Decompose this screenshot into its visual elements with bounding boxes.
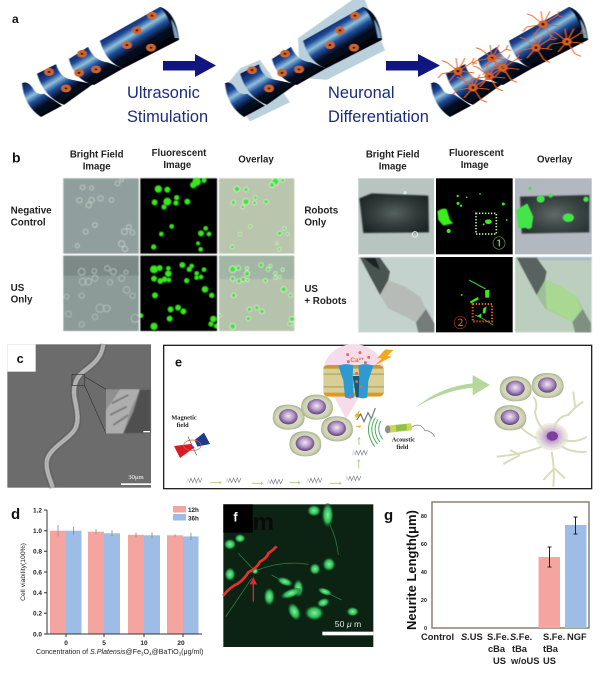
row labels [304, 206, 347, 307]
panel label f [223, 504, 274, 536]
scale bar 50 um [322, 619, 373, 635]
label: neuronal differentiation: Neuronal [328, 84, 395, 102]
category labels: S.Fe. [487, 632, 509, 642]
y tick labels: 40 [421, 570, 427, 576]
y tick labels: 0.8 [33, 548, 42, 556]
column headings: Fluorescent [449, 148, 504, 159]
helix robot with cells [22, 7, 179, 117]
row labels: US [304, 284, 318, 295]
dotted region marker 1 [476, 213, 496, 234]
fluorescent: negative control [140, 178, 217, 254]
row labels [11, 205, 52, 306]
panel label c: c [17, 352, 24, 366]
green neuron cells [224, 503, 359, 622]
category labels: S.US [461, 632, 483, 642]
panel f: fluorescent micrograph of neurites [223, 503, 373, 647]
column headings: Fluorescent [152, 148, 207, 159]
column headings: Image [83, 161, 111, 172]
overlay: negative control [219, 178, 294, 254]
bars [538, 525, 586, 628]
y tick labels: 1.0 [33, 528, 42, 535]
category labels: tBa [543, 644, 559, 654]
legend: 12h [188, 507, 199, 514]
panel label f: m [253, 509, 274, 536]
dotted region marker 2 [473, 304, 492, 321]
panel label a: a [12, 12, 19, 26]
arrow: ultrasonic stimulation [163, 54, 216, 77]
magnified ion channel: Ca²⁺ [350, 357, 365, 364]
DNA path along the bottom [187, 437, 368, 485]
category labels: w/oUS [510, 656, 539, 666]
panel label c [7, 344, 36, 372]
row labels: Control [11, 217, 46, 228]
magnetic field label: field [177, 422, 189, 429]
y axis title: Cell viability(100%) [20, 543, 27, 601]
x tick labels: 0 [64, 640, 68, 647]
scale bar 30 um: 30μm [128, 474, 145, 481]
panel label d: d [11, 506, 20, 523]
column headings: Bright Field [366, 149, 420, 160]
axes [44, 510, 202, 637]
category labels: S.Fe. [543, 632, 565, 642]
fluorescent: US only [139, 256, 218, 331]
y tick labels: 0 [424, 626, 427, 632]
magnetic field label: Magnetic [171, 415, 197, 422]
panel label f: f [233, 511, 238, 525]
label: neuronal differentiation: Differentiation [328, 108, 429, 126]
legend: 36h [188, 516, 199, 522]
icon: magnet [174, 433, 210, 458]
row labels: Only [11, 295, 33, 306]
x axis title: 4 [149, 652, 152, 656]
callout number 2: ② [454, 313, 467, 332]
y tick labels: 80 [421, 514, 427, 520]
zoom inset [72, 374, 151, 433]
x axis title: 3 [179, 652, 182, 656]
column headings: Overlay [238, 155, 274, 166]
panel c: SEM micrograph of helical filament [7, 344, 152, 488]
category labels: cBa [488, 644, 506, 654]
icon: acoustic transducer [385, 423, 435, 437]
category labels: Control [421, 632, 454, 642]
legend [173, 506, 199, 522]
sparks and DNA near transducer [355, 408, 375, 429]
bright field: robots only [358, 178, 434, 254]
panel b left: negative control and US only micrographs [11, 148, 296, 331]
overlay: US plus robots [515, 257, 592, 332]
category labels: US [493, 656, 506, 666]
plot frame [432, 502, 589, 628]
y tick labels: 0.0 [33, 632, 42, 638]
row labels: Robots [304, 206, 339, 217]
row labels: US [11, 283, 25, 294]
neighbouring cells [494, 373, 564, 430]
y tick labels: 1.2 [33, 508, 42, 514]
overlay: US only [218, 256, 296, 331]
x axis title: O [144, 648, 150, 656]
label: ultrasonic stimulation: Stimulation [127, 108, 208, 126]
category labels: tBa [512, 644, 528, 654]
column headings [366, 148, 573, 172]
y tick labels [33, 508, 42, 638]
arrow: neuronal differentiation [386, 54, 440, 77]
panel d: cell viability bar chart [11, 506, 203, 656]
column headings: Image [163, 160, 192, 171]
acoustic waves [368, 416, 383, 447]
overlay: robots only [515, 178, 592, 254]
category labels: US [543, 656, 556, 666]
category labels: S.Fe. [510, 632, 532, 642]
y tick labels: 0.2 [33, 610, 42, 618]
panel label b: b [12, 149, 21, 165]
helix robot with differentiated neurons [431, 7, 588, 117]
error bars [58, 525, 191, 540]
panel b right: robots only and US plus robots micrographs [304, 148, 592, 332]
label: ultrasonic stimulation: Ultrasonic [127, 84, 200, 102]
x tick labels: 5 [102, 640, 106, 647]
acoustic field label: field [396, 444, 409, 451]
error bars [548, 517, 578, 567]
neurite extensions [226, 525, 342, 617]
x tick labels [64, 640, 185, 647]
arrow: differentiation [416, 375, 490, 407]
red arrow [250, 577, 257, 602]
bars [50, 531, 198, 634]
category labels: NGF [567, 632, 587, 642]
x tick labels: 20 [177, 640, 185, 647]
row labels: Only [304, 218, 327, 229]
acoustic field label: Acoustic [392, 437, 415, 444]
y tick labels: 0.4 [33, 590, 42, 597]
column headings: Overlay [537, 155, 573, 166]
x axis title: 3 [141, 652, 144, 656]
callout number 1: ① [492, 233, 506, 252]
column headings: Image [379, 161, 407, 172]
cell cluster [273, 395, 333, 456]
red helix filament [223, 546, 277, 596]
column headings: Bright Field [70, 149, 124, 160]
fluorescent: US plus robots [436, 257, 513, 332]
row labels: + Robots [304, 296, 347, 307]
y tick labels: 0.6 [33, 570, 42, 576]
x tick labels: 10 [140, 640, 148, 647]
column headings [70, 148, 274, 172]
y tick labels: 20 [421, 598, 427, 604]
column headings: Image [461, 160, 489, 171]
x axis title: Concentration of S.Platensis@Fe [36, 648, 141, 656]
helix robot under ultrasound [225, 0, 385, 121]
x axis title: (μg/ml) [181, 648, 203, 656]
row labels: Negative [11, 205, 52, 216]
magnified ion channel [323, 344, 385, 419]
panel e: mechanism diagram [164, 344, 592, 489]
bright field: US only [63, 256, 139, 331]
panel label g: g [384, 507, 393, 524]
y tick labels: 60 [421, 542, 427, 548]
x axis title: @BaTiO [152, 648, 179, 656]
differentiated neuron [497, 392, 587, 487]
helical filament [47, 344, 103, 488]
frame [164, 345, 592, 489]
fluorescent: robots only [436, 178, 513, 254]
y axis title: Neurite Length(μm) [404, 510, 419, 630]
scale bar 30 um [121, 474, 152, 485]
panel label e: e [175, 356, 182, 370]
category labels [421, 632, 587, 666]
bright field: US plus robots [358, 257, 434, 332]
bright field: negative control [63, 178, 139, 254]
scale bar 50 um: 50 μ m [335, 619, 361, 629]
y tick labels [421, 514, 427, 632]
panel g: neurite length bar chart [384, 502, 589, 666]
icon: lightning bolt [375, 349, 393, 365]
panel a: ultrasonic stimulation and neuronal differentiation schematic [12, 0, 588, 126]
